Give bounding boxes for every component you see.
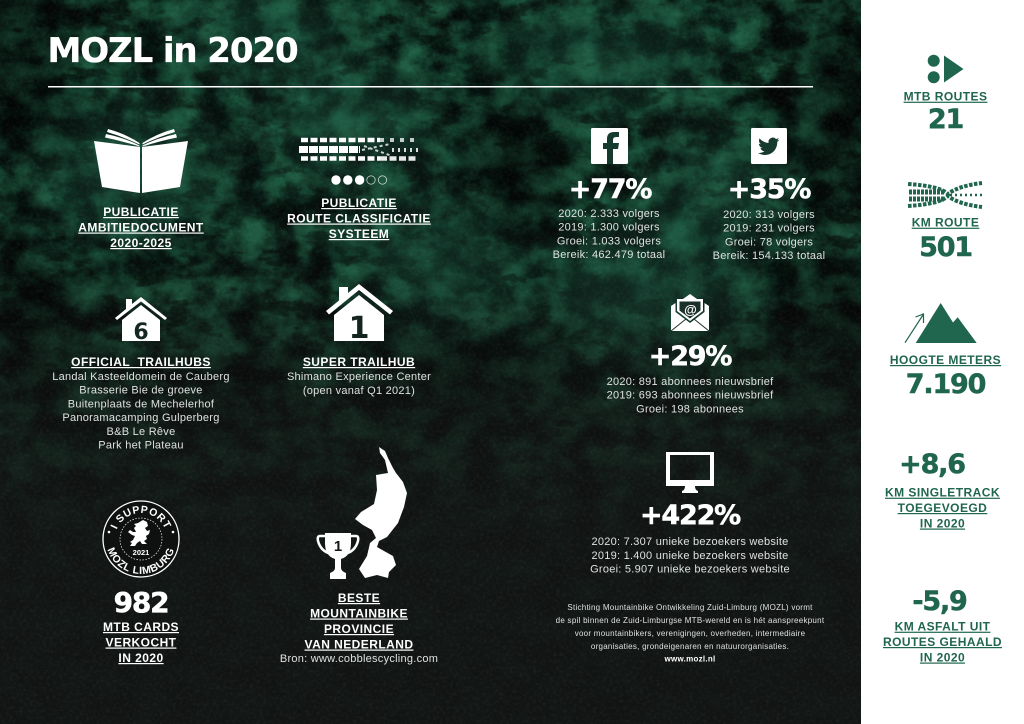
icon: house with 6	[115, 297, 167, 345]
title: MOZL in 2020	[47, 31, 298, 71]
list of trailhubs: B&B Le Rêve	[107, 426, 175, 438]
number: 21	[928, 104, 963, 135]
heading: PUBLICATIE	[103, 205, 179, 219]
details	[553, 208, 665, 261]
details: 2020: 7.307 unieke bezoekers website	[591, 536, 789, 548]
details: Groei: 1.033 volgers	[557, 236, 661, 248]
heading	[103, 620, 179, 665]
panel: mtb cards	[102, 500, 180, 665]
number: +8,6	[899, 449, 965, 480]
heading: SUPER TRAILHUB	[303, 355, 415, 369]
heading: VERKOCHT	[106, 636, 177, 650]
heading: OFFICIAL TRAILHUBS	[71, 355, 211, 369]
list of trailhubs: Landal Kasteeldomein de Cauberg	[52, 371, 230, 383]
list of trailhubs: Park het Plateau	[98, 440, 184, 452]
heading: SYSTEEM	[329, 227, 389, 241]
panel: sidebar hoogte meters	[890, 303, 1001, 400]
heading	[287, 196, 431, 241]
panel: sidebar km route	[908, 183, 982, 263]
icon: route markers	[928, 55, 964, 83]
heading: VAN NEDERLAND	[305, 638, 413, 652]
details: 2019: 693 abonnees nieuwsbrief	[607, 390, 774, 402]
label: KM SINGLETRACK	[885, 486, 1000, 500]
location text: Shimano Experience Center	[287, 371, 431, 383]
heading: IN 2020	[118, 651, 164, 665]
panel: publicatie route classificatie	[287, 140, 431, 241]
label: KM ROUTE	[912, 216, 979, 230]
heading: BESTE	[338, 591, 380, 605]
heading: MTB CARDS	[103, 620, 179, 634]
panel: sidebar background	[861, 0, 1024, 724]
number: 501	[919, 232, 972, 263]
icon: house with 1: 1	[349, 311, 369, 346]
label: IN 2020	[920, 516, 965, 530]
location text: (open vanaf Q1 2021)	[303, 385, 415, 397]
text block: about MOZL: organisaties, grondeigenaren en natuurorganisaties.	[591, 642, 789, 651]
panel: sidebar singletrack	[885, 449, 1000, 530]
details: 2020: 2.333 volgers	[558, 208, 660, 220]
details: 2019: 231 volgers	[723, 223, 815, 235]
details: 2019: 1.300 volgers	[558, 222, 660, 234]
location text	[287, 371, 431, 397]
source: Bron: www.cobblescycling.com	[280, 653, 438, 665]
icon: trophy	[318, 533, 358, 579]
heading: PUBLICATIE	[321, 196, 397, 210]
panel: beste mountainbike provincie	[280, 447, 438, 665]
label: KM ASFALT UIT	[895, 620, 991, 634]
icon: envelope: @	[684, 302, 697, 317]
text block: about MOZL: voor mountainbikers, verenigingen, overheden, intermediaire	[575, 629, 806, 638]
label	[883, 620, 1002, 664]
heading: AMBITIEDOCUMENT	[78, 220, 204, 234]
icon: mountain with arrow	[905, 303, 977, 343]
list of trailhubs: Buitenplaats de Mechelerhof	[68, 398, 215, 410]
details: 2019: 1.400 unieke bezoekers website	[591, 550, 789, 562]
panel: facebook stats	[553, 128, 665, 261]
text block: about MOZL	[556, 603, 825, 664]
number: 982	[114, 586, 168, 619]
statistic: +35%	[728, 174, 811, 205]
heading: MOUNTAINBIKE	[310, 606, 408, 620]
label: TOEGEVOEGD	[898, 501, 987, 515]
heading: PROVINCIE	[324, 622, 394, 636]
panel: super trailhub	[287, 284, 431, 397]
heading: ROUTE CLASSIFICATIE	[287, 212, 431, 226]
icon: house with 1	[326, 284, 393, 346]
details: Bereik: 462.479 totaal	[553, 249, 665, 261]
icon: open book	[94, 129, 188, 193]
list of trailhubs: Brasserie Bie de groeve	[79, 385, 203, 397]
number: -5,9	[912, 586, 967, 617]
icon: envelope	[671, 294, 709, 331]
list of trailhubs	[52, 371, 230, 452]
icon: monitor	[666, 452, 714, 493]
panel: newsletter stats	[607, 294, 774, 415]
icon: i support mozl badge: 2021	[133, 548, 149, 557]
icon: i support mozl badge: I SUPPORT	[110, 506, 172, 529]
label: ROUTES GEHAALD	[883, 635, 1002, 649]
statistic: +422%	[640, 500, 741, 531]
icon: twitter	[751, 128, 787, 164]
label: MTB ROUTES	[904, 90, 987, 104]
details: Groei: 78 volgers	[725, 236, 813, 248]
panel: publicatie ambitiedocument	[78, 129, 204, 250]
label: IN 2020	[920, 650, 965, 664]
icon: i support mozl badge	[102, 500, 180, 578]
details: 2020: 891 abonnees nieuwsbrief	[607, 376, 774, 388]
details: Groei: 5.907 unieke bezoekers website	[590, 564, 790, 576]
icon: i support mozl badge: MOZL LIMBURG	[108, 547, 174, 574]
text block: about MOZL: de spil binnen de Zuid-Limburgse MTB-wereld en is hét aanspreekpunt	[556, 616, 825, 625]
heading	[305, 591, 413, 652]
number: 7.190	[906, 369, 986, 400]
panel: twitter stats	[713, 128, 825, 262]
panel: sidebar asfalt	[883, 586, 1002, 664]
heading: 2020-2025	[110, 236, 172, 250]
icon: tyre tracks	[299, 140, 420, 158]
icon: trophy: 1	[334, 538, 342, 555]
details: Groei: 198 abonnees	[636, 403, 744, 415]
icon: difficulty dots	[331, 175, 387, 185]
panel: website stats	[590, 452, 790, 576]
icon: house with 6: 6	[133, 320, 149, 345]
icon: facebook	[591, 128, 628, 164]
heading	[78, 205, 204, 250]
icon: limburg map	[355, 447, 407, 578]
details: 2020: 313 volgers	[723, 209, 815, 221]
details	[590, 536, 790, 576]
icon: crossing tyre tracks	[908, 183, 982, 207]
details: Bereik: 154.133 totaal	[713, 250, 825, 262]
details	[713, 209, 825, 262]
statistic: +29%	[649, 341, 732, 372]
panel: official trailhubs	[52, 297, 230, 452]
label	[885, 486, 1000, 530]
text block: about MOZL: www.mozl.nl	[663, 654, 716, 664]
label: HOOGTE METERS	[890, 353, 1001, 367]
list of trailhubs: Panoramacamping Gulperberg	[62, 412, 220, 424]
details	[607, 376, 774, 415]
text block: about MOZL: Stichting Mountainbike Ontwikkeling Zuid-Limburg (MOZL) vormt	[567, 603, 813, 612]
panel: sidebar mtb routes	[904, 55, 987, 135]
statistic: +77%	[569, 174, 652, 205]
